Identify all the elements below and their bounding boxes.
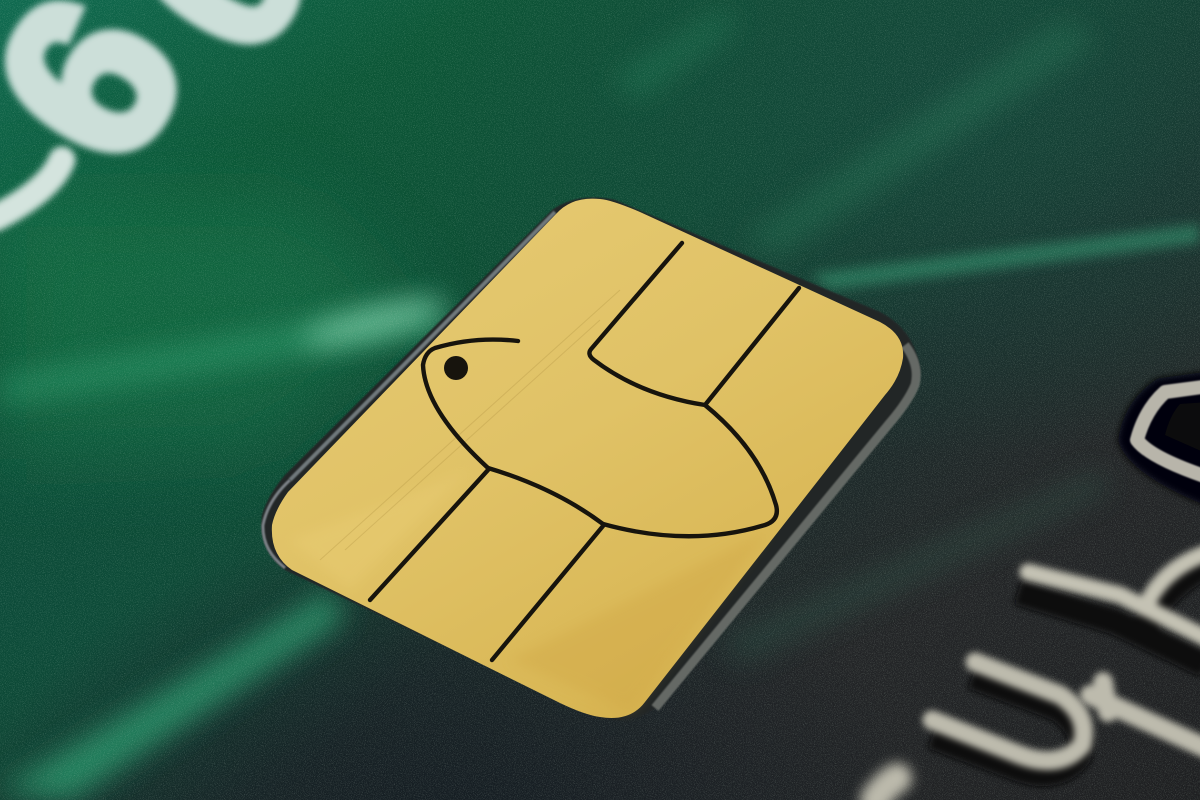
contact lines [370, 243, 799, 660]
brushed sheen [290, 470, 470, 590]
printed characters, top left [0, 0, 356, 218]
embossed characters, right side [875, 378, 1200, 800]
embossed character 4 [875, 778, 897, 800]
chip socket [261, 198, 920, 720]
embossed character 3 [932, 662, 1200, 774]
gold chip [272, 199, 903, 718]
surface scratches [320, 290, 620, 560]
chip plate [272, 199, 903, 718]
chip dot [444, 356, 468, 380]
chip socket left edge [290, 212, 555, 480]
chip socket light edge, left [263, 480, 290, 568]
chip socket light edge, right [655, 345, 916, 708]
partial digit arc [0, 160, 62, 218]
embossed character 1 [1125, 378, 1200, 500]
embossed character 2 [1018, 552, 1200, 665]
